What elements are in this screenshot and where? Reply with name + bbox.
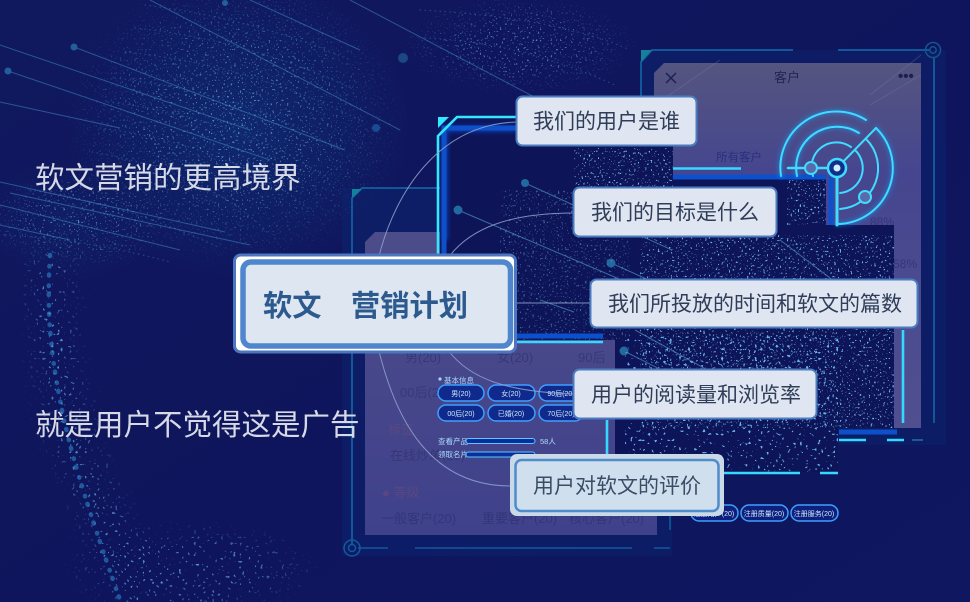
- node: goal: [574, 188, 776, 236]
- bottom frame: [358, 480, 670, 548]
- pills: basic info: [438, 375, 583, 421]
- pills: bottom row: 注册用户(20): [694, 509, 734, 518]
- pills: basic info: 00后(20): [447, 409, 475, 418]
- card labels: 核心客户(20): [569, 511, 644, 526]
- card: [654, 63, 921, 428]
- progress bars: 查看产品: [438, 436, 468, 446]
- pills: basic info: 男(20): [451, 390, 471, 398]
- panel: back-right client card: 所有客户: [716, 150, 762, 164]
- panel: back-left client card: [342, 188, 672, 556]
- icon: radar: [780, 112, 893, 225]
- band behind card: [342, 188, 672, 556]
- band behind card: [641, 50, 946, 445]
- heading: left line two: 就是用户不觉得这是广告: [35, 409, 360, 442]
- pills: basic info: 女(20): [501, 389, 521, 398]
- card labels: 重要客户(20): [482, 511, 557, 526]
- pills: basic info: 已婚(20): [498, 409, 524, 418]
- background: speckled globe: [0, 0, 634, 266]
- progress bars: 58人: [540, 437, 556, 446]
- heading: left line one: 软文营销的更高境界: [35, 162, 301, 195]
- node: timing: 我们所投放的时间和软文的篇数: [608, 293, 902, 316]
- frame: [352, 188, 440, 545]
- node: reads: 用户的阅读量和浏览率: [591, 384, 801, 407]
- central node: plan: [234, 255, 516, 352]
- pills: bottom row: 注册质量(20): [744, 509, 784, 518]
- blue frame bars: [445, 129, 516, 240]
- panel: back-right client card: 88%: [870, 215, 894, 229]
- cyan frame lines: [438, 117, 516, 255]
- panel: back-right client card: 客户: [774, 70, 800, 85]
- card header: [666, 73, 676, 83]
- background: speckled arc lower left: [22, 242, 310, 602]
- frame: [641, 50, 934, 423]
- node: reviews: 用户对软文的评价: [533, 475, 701, 498]
- node: reviews: [510, 454, 724, 516]
- pills: basic info: 90后(20): [547, 389, 575, 398]
- central node: plan: 软文 营销计划: [263, 290, 468, 323]
- node: reads: [574, 370, 816, 418]
- background: rays with node dots: [0, 0, 540, 250]
- panel: back-right client card: •••: [898, 68, 914, 85]
- card labels: 00后(20): [400, 385, 451, 400]
- card: [365, 232, 657, 535]
- panel: back-right client card: 58%: [893, 257, 917, 271]
- card labels: [381, 350, 644, 526]
- node: who: 我们的用户是谁: [533, 110, 680, 134]
- dot texture: [500, 148, 894, 472]
- screen rays: [454, 179, 892, 420]
- card labels: 女(20): [497, 350, 533, 365]
- progress bars: 领取名片: [438, 449, 468, 459]
- card labels: 90后: [578, 350, 605, 365]
- panel: back-right client card: [641, 42, 946, 445]
- pills: bottom row: [691, 505, 838, 521]
- panel: front dark screen: [438, 117, 923, 473]
- card labels: ● 等级: [382, 485, 419, 500]
- pills: bottom row: 注册服务(20): [794, 509, 834, 518]
- node: goal: 我们的目标是什么: [591, 202, 759, 224]
- pills: basic info: 70后(20): [547, 409, 575, 418]
- pills: basic info: 基本信息: [444, 375, 474, 385]
- progress bars: [438, 436, 556, 459]
- node: who: [516, 96, 696, 146]
- card labels: 标签: [388, 422, 414, 437]
- node: timing: [590, 280, 918, 328]
- connector curves: [379, 122, 591, 486]
- background: dotted rows: [5, 5, 630, 600]
- card labels: 在线炒单(20): [390, 448, 465, 463]
- card labels: 一般客户(20): [381, 511, 456, 526]
- card labels: 男(20): [405, 350, 441, 365]
